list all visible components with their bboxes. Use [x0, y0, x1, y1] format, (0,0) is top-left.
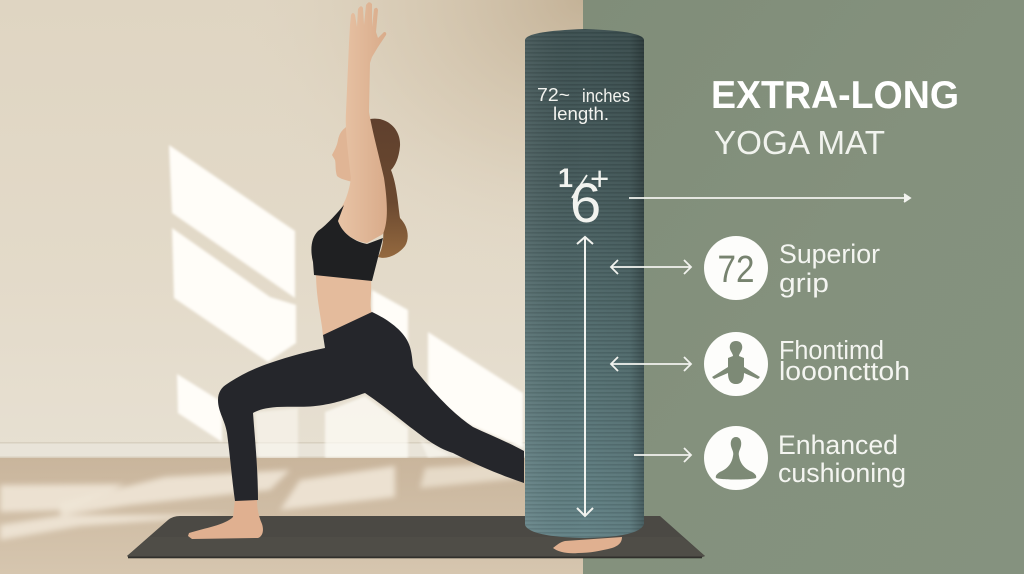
rolled yoga mat: [525, 29, 644, 538]
black leggings: [218, 312, 524, 501]
background: studio wall: [0, 0, 584, 458]
baseboard: [0, 442, 584, 458]
front foot: [188, 500, 263, 539]
mat number mark: [558, 160, 609, 234]
sports top: [311, 205, 383, 281]
title: EXTRA-LONG: [711, 74, 959, 117]
arrow: horizontal length: [629, 194, 910, 202]
raised arm and shoulder: [338, 2, 387, 243]
icon: 72 badge: 72: [718, 249, 754, 291]
mat number mark: 1: [558, 163, 573, 193]
arrow: to enhanced cushioning: [634, 448, 691, 462]
floor sunlight patches: [0, 462, 523, 540]
mat length label: length.: [553, 104, 609, 124]
mat length label: 72~: [537, 85, 570, 105]
title: YOGA MAT: [714, 124, 885, 161]
feature label: second feature: loooncttoh: [779, 358, 910, 386]
face and neck: [332, 124, 372, 182]
wall sunlight patches: [169, 145, 523, 458]
wooden floor: [0, 458, 584, 574]
woman in low lunge pose: [188, 2, 524, 539]
mat number mark: +: [590, 160, 609, 197]
arrow: to superior grip: [611, 260, 691, 274]
ponytail and hair: [370, 119, 408, 258]
icon: 72 badge: [704, 236, 768, 300]
right colour panel: [583, 0, 1024, 574]
mat length label: [537, 85, 630, 124]
flat yoga mat on the floor: [127, 516, 705, 558]
arrow: vertical length: [577, 237, 593, 516]
mat number mark: 6: [570, 171, 601, 234]
icon: seated figure: [704, 426, 768, 490]
title: [711, 74, 959, 161]
torso: [316, 272, 372, 336]
feature label: enhanced cushioning: Enhanced: [778, 430, 898, 460]
feature label: superior grip: [779, 239, 880, 298]
mat length label: inches: [582, 86, 630, 106]
arrow: to second feature: [611, 357, 691, 371]
feature label: enhanced cushioning: cushioning: [778, 458, 906, 488]
feature label: superior grip: Superior: [779, 239, 880, 269]
feature label: second feature: Fhontimd: [779, 337, 884, 365]
feature label: second feature: [779, 337, 910, 386]
feature label: enhanced cushioning: [778, 430, 906, 488]
feature label: superior grip: grip: [779, 268, 829, 298]
rear foot: [553, 537, 622, 553]
icon: figure with arms out: [704, 332, 768, 396]
